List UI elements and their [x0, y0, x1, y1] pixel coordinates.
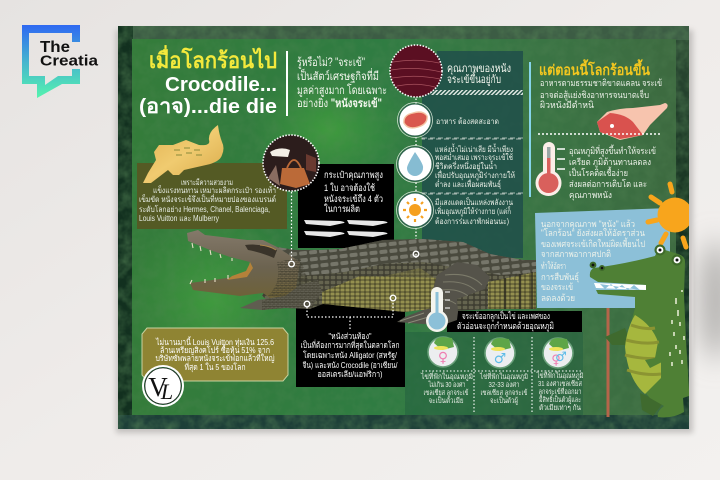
intro text: อย่างยิ่ง "หนังจระเข้"	[297, 95, 382, 110]
icon: ham	[597, 103, 668, 140]
text: sunlight: มีแสงแดดเป็นแหล่งพลังงาน	[435, 197, 513, 207]
skin quality heading: คุณภาพของหนัง	[447, 63, 511, 75]
gold plaque: Louis Vuitton: ที่สุด 1 ใน 5 ของโลก	[184, 361, 246, 372]
text: belly skin: จีน) และหนัง Crocodile (อาเซียน/	[302, 361, 398, 370]
text: heat stress: คุณภาพหนัง	[569, 190, 612, 201]
text: male temperature: จะเป็นตัวผู้	[490, 395, 518, 405]
croc teeth	[190, 243, 232, 284]
text: mixed temperature	[536, 370, 584, 412]
text: mixed temperature: ลูกจระเข้ที่ออกมา	[538, 386, 582, 396]
croc neck scales	[268, 258, 310, 298]
hatch strip	[430, 90, 523, 95]
text: mixed temperature: ตัวเมียเท่าๆ กัน	[539, 403, 581, 412]
cartoon crocodile with sign pole	[590, 244, 689, 417]
text: male temperature: 32-33 องศา	[488, 380, 520, 389]
text: heat stress: ส่งผลต่อการเติบโต และ	[569, 179, 647, 189]
text: male temperature: ไข่ที่ฟักในอุณหภูมิ	[479, 371, 528, 381]
blue sign: การสืบพันธุ์	[541, 271, 579, 283]
panel: dark egg section	[405, 332, 583, 415]
mascot body	[590, 250, 689, 417]
teeth	[594, 283, 646, 290]
title	[139, 44, 277, 118]
black panel: bag info: 1 ใบ อาจต้องใช้	[324, 182, 375, 194]
black panel: bag info: หนังจระเข้ถึง 4 ตัว	[324, 194, 383, 205]
gold plaque: Louis Vuitton: บริษัทซัพพลายหนังจระเข้ฟอกแล้วที่ใหญ่	[156, 352, 275, 363]
text: sunlight: ต้องการร่มเงาพักผ่อนนะ)	[435, 217, 509, 226]
panel: global warming	[529, 59, 668, 201]
text: female temperature	[420, 371, 473, 405]
blue sign: "โลกร้อน" ยังส่งผลให้อัตราส่วน	[541, 228, 645, 238]
icon: thermometer	[536, 142, 565, 196]
icon: LV logo: L	[160, 379, 173, 404]
icon: mixed egg: ♂	[555, 350, 567, 365]
text: female temperature: เซลเซียส ลูกจระเข้	[424, 388, 468, 397]
black band: egg temperature	[447, 311, 582, 332]
intro text: เป็นสัตว์เศรษฐกิจที่มี	[297, 68, 379, 83]
icon: sun	[396, 192, 434, 228]
olive panel: why crocodile skin: เข็มขัด หนังจระเข้จึงเป็นที่หมายปองของแบรนด์	[139, 193, 276, 204]
text: food shortage	[540, 78, 662, 110]
croc body	[262, 239, 536, 312]
connector dots	[289, 192, 419, 331]
black panel: bag info	[298, 164, 394, 248]
icon: mixed egg: ♀	[551, 353, 561, 368]
text: belly skin: เป็นที่ต้องการมากที่สุดในตลาดโลก	[300, 339, 400, 350]
blue sign: นอกจากคุณภาพ "หนัง" แล้ว	[541, 219, 635, 230]
olive panel: why crocodile skin	[137, 163, 287, 229]
icon: water drop	[396, 146, 434, 182]
text: female temperature: ไข่ที่ฟักในอุณหภูมิ	[420, 371, 473, 381]
dark arm	[605, 328, 632, 345]
poster	[118, 26, 692, 429]
text: belly skin	[300, 332, 400, 379]
text: water: ต่ำลง และเพื่อผสมพันธุ์	[435, 178, 501, 189]
intro text: รู้หรือไม่? "จระเข้"	[297, 56, 365, 69]
blue sign: ของจระเข้	[541, 282, 573, 292]
text: belly skin: ออสเตรเลีย/แอฟริกา)	[318, 370, 383, 379]
skin quality heading	[447, 63, 511, 86]
intro text: มูลค่าสูงมาก โดยเฉพาะ	[297, 83, 387, 97]
text: male temperature	[479, 371, 528, 405]
logo: The Creatia: The	[40, 39, 70, 56]
icon: LV logo	[142, 365, 184, 407]
blue sign: ทำให้อัตรา	[541, 261, 566, 271]
text: egg temperature: จระเข้ออกลูกเป็นไข่ และเพศของ	[462, 309, 550, 322]
blue sign	[535, 208, 670, 308]
text: female temperature: ไม่เกิน 30 องศา	[428, 380, 466, 389]
croc mouth	[227, 262, 253, 280]
icon: crocodile skin swatch	[390, 45, 442, 97]
black panel: bag info: กระเป๋าคุณภาพสูง	[324, 170, 383, 181]
olive panel: why crocodile skin: เพราะมีความสวยงาม	[181, 178, 233, 187]
egg dividers	[422, 337, 583, 412]
text: heat stress	[569, 144, 656, 201]
croc head	[187, 230, 300, 298]
text: heat stress: เครียด ภูมิต้านทานลดลง	[569, 157, 651, 168]
olive panel: why crocodile skin: Louis Vuitton และ Mulberry	[139, 214, 219, 223]
text: mixed temperature: ไข่ที่ฟักในอุณหภูมิ	[536, 370, 584, 380]
text: belly skin: โดยเฉพาะหนัง Alligator (สหรัฐ/	[303, 350, 398, 360]
text: egg temperature	[457, 309, 554, 332]
eyes	[654, 244, 666, 256]
croc scales	[278, 239, 536, 312]
icon: mixed egg	[543, 338, 573, 368]
title: เมื่อโลกร้อนไป	[149, 44, 277, 73]
sign pole	[606, 308, 610, 417]
croc eye	[245, 245, 277, 258]
blue sign: ลดลงด้วย	[541, 293, 575, 303]
text: food: อาหาร ต้องสดสะอาด	[436, 117, 499, 126]
icon: female egg	[428, 337, 458, 367]
text: mixed temperature: มีสิทธิ์เป็นตัวผู้และ	[539, 394, 581, 404]
green panel	[125, 39, 676, 415]
text: heat stress: เป็นโรคติดเชื้อง่าย	[569, 166, 628, 178]
text: water: ชีวิตครึ่งหนึ่งอยู่ในน้ำ	[435, 160, 497, 172]
icon: small thermometer	[426, 287, 450, 332]
black panel: bag info: ในการผลิต	[324, 203, 360, 215]
text: food shortage: อาจต่อสู้แย่งชิงอาหารจนบาดเจ็บ	[540, 88, 649, 101]
text: food shortage: ผิวหนังมีตำหนิ	[540, 100, 594, 110]
gold plaque: Louis Vuitton	[142, 328, 288, 381]
skin quality heading: จระเข้ขึ้นอยู่กับ	[447, 71, 501, 86]
text: sunlight	[435, 197, 513, 226]
dark back foot	[640, 393, 663, 416]
icon: male egg: ♂	[494, 351, 506, 367]
intro text	[297, 56, 387, 110]
blue sign: จากสภาพอากาศปกติ	[541, 249, 611, 259]
text: water	[435, 143, 515, 189]
title divider	[286, 51, 288, 116]
text: mixed temperature: 31 องศาเซลเซียส	[538, 379, 582, 388]
text: heat stress: อุณหภูมิที่สูงขึ้นทำให้จระเข้	[569, 144, 656, 157]
belly	[625, 315, 661, 394]
icon: sun with rays	[648, 184, 692, 247]
icon: female egg: ♀	[438, 350, 448, 366]
realistic crocodile	[187, 225, 540, 325]
icon: meat	[398, 102, 432, 138]
text: water: เพื่อปรับอุณหภูมิร่างกายให้	[435, 169, 515, 181]
logo: The Creatia	[22, 25, 99, 98]
icon: bags photo	[263, 135, 319, 191]
forest background	[118, 26, 689, 429]
croc back leg	[397, 262, 490, 325]
text: male temperature: เซลเซียส ลูกจระเข้	[480, 388, 528, 397]
text: water: พอสม่ำเสมอ เพราะจระเข้ใช้	[435, 151, 513, 162]
olive panel: why crocodile skin: แข็งแรงทนทาน เหมาะผลิตกระเป๋า รองเท้า	[153, 185, 276, 195]
blue sign: ของเพศจระเข้เกิดใหม่ผิดเพี้ยนไป	[541, 237, 645, 249]
icon: four crocodile silhouettes	[304, 220, 388, 237]
text: sunlight: เพิ่มอุณหภูมิให้ร่างกาย (แต่ก็	[435, 205, 511, 217]
text: water: แหล่งน้ำไม่เน่าเสีย มีน้ำเพียง	[435, 143, 513, 154]
heading: แต่ตอนนี้โลกร้อนขึ้น	[539, 59, 650, 79]
text: belly skin: "หนังส่วนท้อง"	[328, 332, 372, 341]
text: female temperature: จะเป็นตัวเมีย	[428, 395, 464, 405]
text: egg temperature: ตัวอ่อนจะถูกกำหนดด้วยอุณหภูมิ	[457, 321, 554, 332]
title: Crocodile...	[165, 74, 277, 96]
skin dots	[670, 290, 684, 366]
olive panel: why crocodile skin: ระดับโลกอย่าง Hermes, Chanel, Balenciaga,	[139, 204, 270, 214]
croc front leg	[240, 280, 322, 310]
gold plaque: Louis Vuitton: ไม่นานมานี้ Louis Vuitton ทุ่มเงิน 125.6	[155, 336, 274, 347]
text: food shortage: อาหารตามธรรมชาติขาดแคลน จระเข้	[540, 78, 662, 88]
arm	[645, 342, 662, 368]
icon: gold crocodile	[143, 125, 224, 183]
panel: skin quality	[390, 45, 523, 258]
icon: male egg	[485, 338, 515, 368]
black panel: belly skin	[296, 300, 405, 387]
icon: LV logo: V	[148, 372, 168, 402]
logo: The Creatia: Creatia	[40, 54, 99, 70]
title: (อาจ)...die die	[139, 96, 277, 118]
gold plaque: Louis Vuitton: ล้านเหรียญสิงคโปร์ ซื้อหุ้น 51% จาก	[160, 344, 270, 355]
